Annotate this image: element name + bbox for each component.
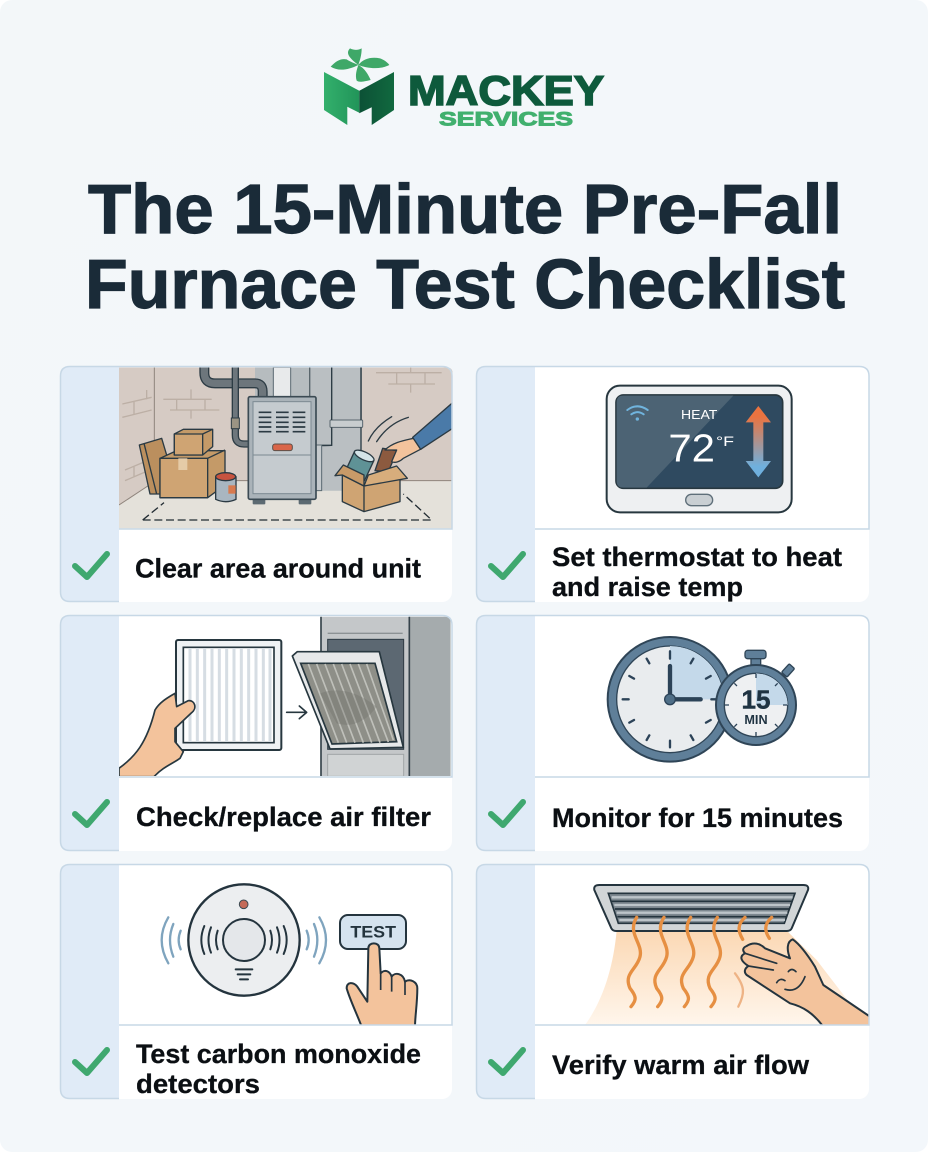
illustration: clock and stopwatch <box>608 637 796 762</box>
panel: clear area around unit <box>60 366 453 602</box>
label: Test carbon monoxide <box>136 1039 421 1069</box>
illustration: thermostat: °F <box>716 433 734 449</box>
icon: green check <box>75 554 107 577</box>
label: Verify warm air flow <box>552 1050 810 1080</box>
panel: check or replace air filter <box>60 615 452 851</box>
panel: monitor for 15 minutes <box>476 615 869 851</box>
label: and raise temp <box>552 572 743 602</box>
logo <box>324 48 604 131</box>
title: Furnace Test Checklist <box>85 245 845 323</box>
illustration: thermostat: 72 <box>668 427 715 471</box>
panel: verify warm air flow <box>476 864 870 1099</box>
icon: green check <box>75 802 107 825</box>
panel: test carbon monoxide detectors <box>60 864 452 1099</box>
icon: green check <box>491 1050 523 1073</box>
illustration: CO detector and test button: TEST <box>350 922 396 941</box>
illustration: thermostat <box>607 386 792 512</box>
illustration: CO detector and test button <box>162 884 417 1027</box>
panel: set thermostat <box>476 366 869 602</box>
illustration: air filter swap <box>119 617 451 777</box>
illustration: thermostat: HEAT <box>681 407 717 422</box>
label <box>136 1039 421 1099</box>
icon: green check <box>491 554 523 577</box>
illustration: furnace with boxes <box>119 367 453 528</box>
illustration: clock and stopwatch: MIN <box>744 713 768 727</box>
illustration: clock and stopwatch: 15 <box>742 684 770 714</box>
illustration: vent with warm air and hand <box>585 885 870 1027</box>
wordmark: SERVICES: SERVICES <box>439 108 573 130</box>
title <box>85 170 845 323</box>
wordmark: MACKEY: MACKEY <box>408 67 604 114</box>
icon: fan and M cube <box>324 48 394 125</box>
label: Clear area around unit <box>135 554 421 584</box>
label: detectors <box>136 1069 260 1099</box>
icon: green check <box>491 802 523 825</box>
label <box>552 542 842 602</box>
label: Check/replace air filter <box>136 802 431 832</box>
label: Set thermostat to heat <box>552 542 842 572</box>
title: The 15-Minute Pre-Fall <box>88 170 842 248</box>
label: Monitor for 15 minutes <box>552 803 843 833</box>
icon: green check <box>75 1050 107 1073</box>
